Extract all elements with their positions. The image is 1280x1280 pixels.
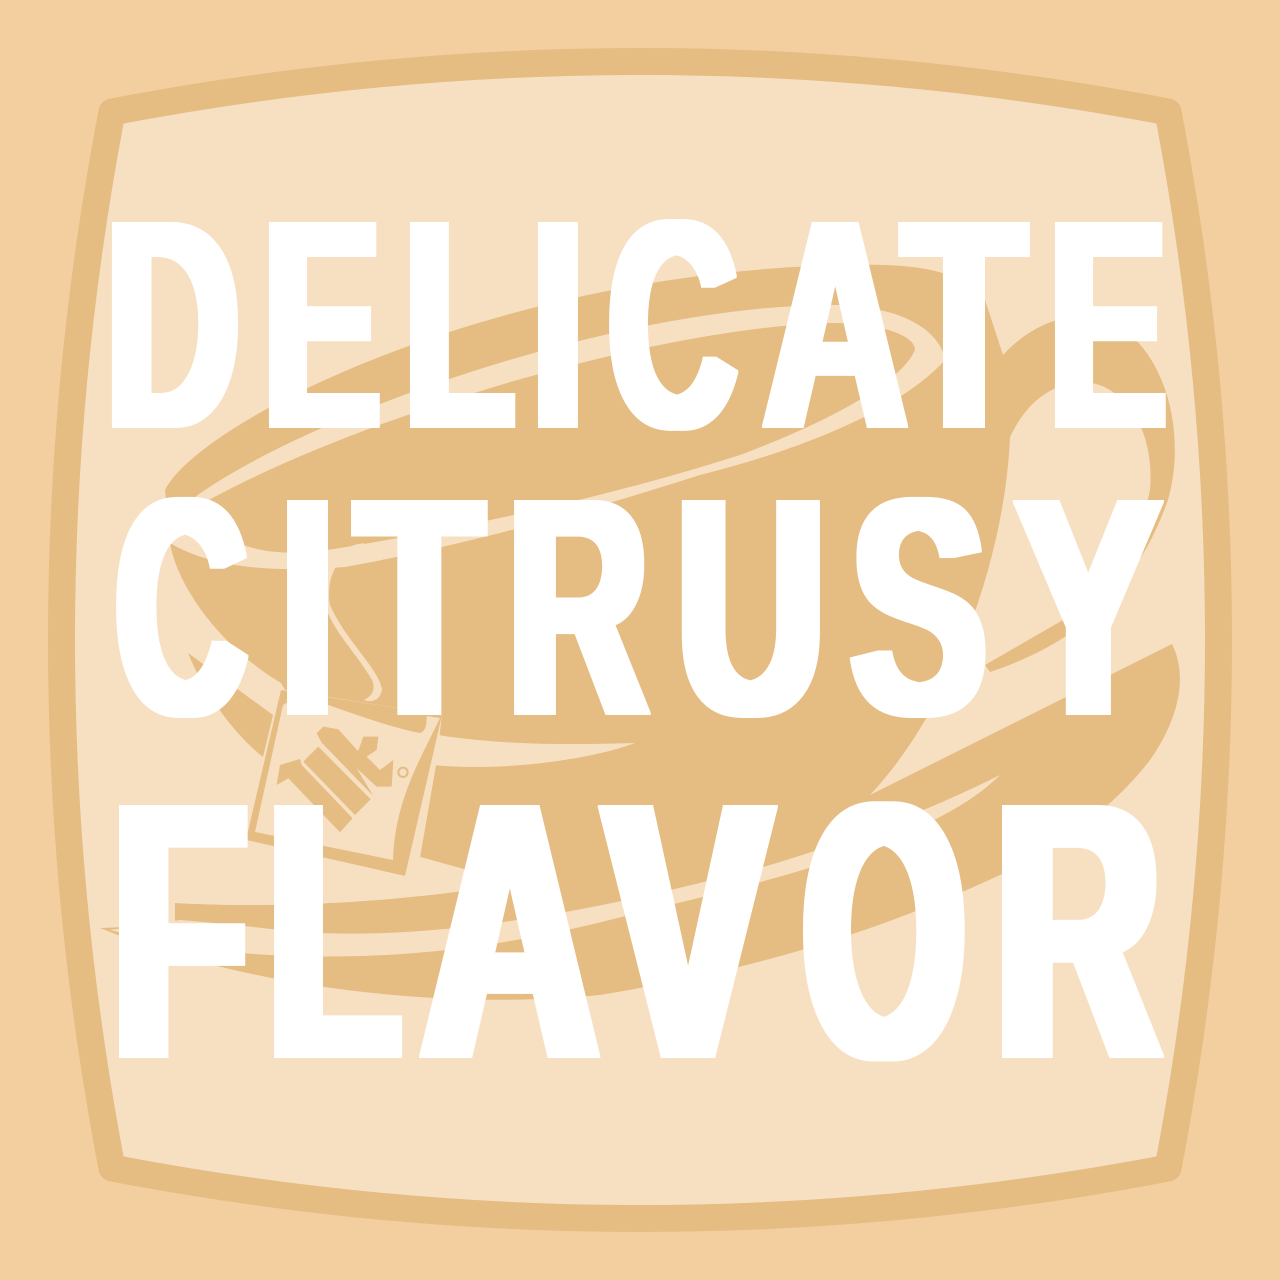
registered mark: [398, 768, 408, 777]
title: FLAVOR: V: [605, 727, 772, 1135]
logo middle bar: [303, 747, 371, 815]
title: DELICATE: E: [1050, 159, 1166, 490]
cup lower left wedge: [188, 653, 273, 757]
title: CITRUSY: T: [356, 434, 483, 780]
icon: tea cup with saucer and tea tag: [100, 265, 1180, 1000]
title: DELICATE: T: [902, 158, 1026, 490]
rim highlight ring: [170, 305, 945, 569]
title: DELICATE: I: [532, 158, 584, 490]
title: CITRUSY: [116, 433, 1161, 781]
title: CITRUSY: C: [116, 433, 246, 780]
logo right letter: [355, 737, 393, 787]
tea tag inner: [255, 695, 440, 860]
title: CITRUSY: S: [851, 435, 986, 780]
title: DELICATE: A: [764, 160, 907, 490]
title: FLAVOR: O: [804, 727, 964, 1135]
cup bottom highlight: [433, 735, 635, 767]
title: FLAVOR: L: [269, 728, 400, 1135]
logo on tea tag: [277, 727, 408, 832]
title: FLAVOR: R: [996, 728, 1160, 1135]
steam curve: [322, 543, 382, 701]
logo upper bar: [317, 727, 373, 796]
logo left bar: [277, 759, 353, 832]
title: CITRUSY: I: [282, 434, 334, 781]
title: DELICATE: [106, 158, 1166, 491]
title: DELICATE: L: [404, 159, 514, 490]
title: DELICATE: D: [106, 159, 239, 491]
title: FLAVOR: A: [422, 726, 598, 1135]
title: FLAVOR: F: [113, 727, 247, 1135]
saucer highlight: [110, 775, 1000, 957]
title: DELICATE: C: [608, 159, 737, 490]
cup body and rim: [100, 265, 1180, 1000]
tea tag outline: [246, 690, 442, 876]
title: CITRUSY: Y: [1016, 434, 1161, 780]
tag side sliver: [160, 765, 515, 905]
title: CITRUSY: R: [508, 433, 648, 780]
title: DELICATE: E: [264, 159, 380, 490]
title: CITRUSY: U: [676, 434, 826, 780]
title: FLAVOR: [113, 726, 1160, 1135]
